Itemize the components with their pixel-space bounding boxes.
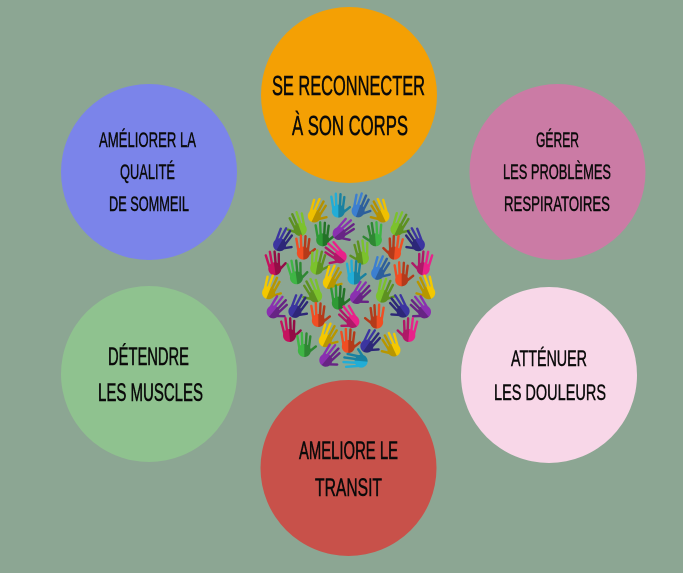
- circle: gérer les problèmes respiratoires: LES PROBLÈMES: [503, 161, 611, 184]
- icon: globe of colourful hands: [260, 192, 437, 372]
- circle: améliore le transit: [260, 380, 436, 556]
- circle: atténuer les douleurs: ATTÉNUER: [511, 346, 587, 371]
- circle: gérer les problèmes respiratoires: [470, 84, 646, 260]
- circle: détendre les muscles: LES MUSCLES: [98, 379, 203, 407]
- circle: atténuer les douleurs: [461, 287, 637, 463]
- circle: gérer les problèmes respiratoires: GÉRER: [536, 129, 579, 152]
- circle: détendre les muscles: DÉTENDRE: [108, 342, 189, 371]
- circle: améliorer la qualité de sommeil: DE SOMMEIL: [109, 193, 189, 216]
- circle: se reconnecter à son corps: SE RECONNECTER: [272, 70, 425, 101]
- circle: améliorer la qualité de sommeil: QUALITÉ: [120, 161, 175, 184]
- circle: améliore le transit: TRANSIT: [315, 474, 382, 502]
- circle: améliorer la qualité de sommeil: [61, 84, 237, 260]
- circle: améliore le transit: AMELIORE LE: [299, 437, 398, 465]
- circle: améliorer la qualité de sommeil: AMÉLIORER LA: [99, 129, 196, 152]
- circle: se reconnecter à son corps: À SON CORPS: [292, 110, 408, 141]
- circle: gérer les problèmes respiratoires: RESPIRATOIRES: [504, 193, 610, 216]
- circle: atténuer les douleurs: LES DOULEURS: [494, 380, 606, 405]
- circle: détendre les muscles: [61, 286, 237, 462]
- circle: se reconnecter à son corps: [261, 7, 437, 183]
